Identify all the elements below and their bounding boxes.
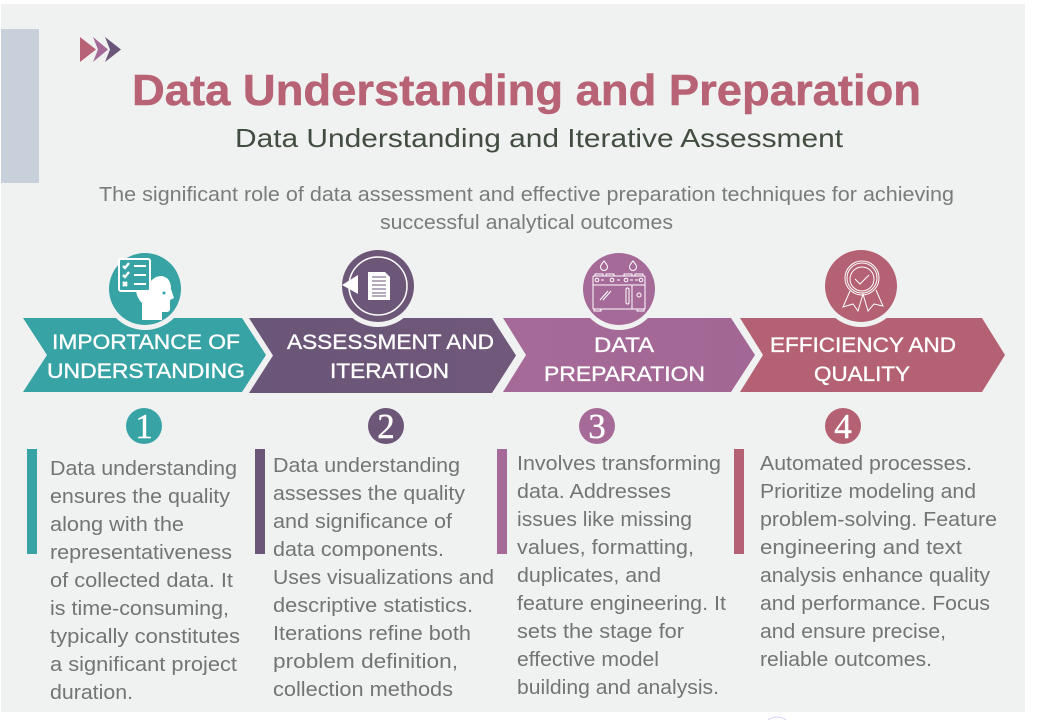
text block 3: duplicates, and xyxy=(517,565,661,587)
text block 3 xyxy=(517,453,726,699)
arrow labels: PREPARATION xyxy=(544,363,705,386)
cropped circle at bottom edge xyxy=(762,717,792,720)
text block 2: Iterations refine both xyxy=(273,623,471,645)
text block 2 xyxy=(273,455,494,701)
number badge 4 xyxy=(825,407,861,446)
text block 4: engineering and text xyxy=(760,537,962,559)
number badge 2 xyxy=(368,407,404,446)
text block 3: sets the stage for xyxy=(517,621,684,643)
text block 2: assesses the quality xyxy=(273,483,465,505)
number badge 2: 2 xyxy=(377,407,395,446)
icon: stove xyxy=(578,248,660,330)
text block 4: and ensure precise, xyxy=(760,621,946,643)
arrow labels: ASSESSMENT AND xyxy=(287,331,494,354)
text block 1: ensures the quality xyxy=(50,486,230,508)
number badge 1 xyxy=(126,407,162,446)
text block 1: representativeness xyxy=(50,542,232,564)
icon: award ribbon xyxy=(820,245,902,327)
number badge 3 xyxy=(579,407,615,446)
text block 1: duration. xyxy=(50,682,133,704)
text block 2: collection methods xyxy=(273,679,453,701)
text block 1: a significant project xyxy=(50,654,237,676)
number badge 3: 3 xyxy=(588,407,606,446)
arrow: assessment and iteration xyxy=(249,318,516,393)
accent bar 2 xyxy=(255,449,265,554)
arrow labels: DATA xyxy=(594,334,654,357)
text block 3: data. Addresses xyxy=(517,481,671,503)
subtitle: Data Understanding and Iterative Assessment xyxy=(235,123,844,153)
text block 4: analysis enhance quality xyxy=(760,565,990,587)
arrow: efficiency and quality xyxy=(740,318,1005,392)
number badge 1: 1 xyxy=(135,407,153,446)
text block 3: effective model xyxy=(517,649,659,671)
text block 3: issues like missing xyxy=(517,509,692,531)
text block 2: problem definition, xyxy=(273,651,458,673)
text block 4 xyxy=(760,453,997,671)
icon: triple chevrons xyxy=(80,37,121,62)
text block 4: reliable outcomes. xyxy=(760,649,932,671)
icon: document with circular arrow xyxy=(337,245,419,327)
accent bar 4 xyxy=(734,449,744,554)
text block 1: typically constitutes xyxy=(50,626,240,648)
arrow labels: EFFICIENCY AND xyxy=(770,334,956,357)
text block 4: and performance. Focus xyxy=(760,593,990,615)
text block 2: data components. xyxy=(273,539,444,561)
text block 2: Data understanding xyxy=(273,455,460,477)
text block 2: and significance of xyxy=(273,511,452,533)
text block 1: Data understanding xyxy=(50,458,237,480)
text block 4: problem-solving. Feature xyxy=(760,509,997,531)
arrow labels xyxy=(47,331,956,386)
icon: checklist and head xyxy=(104,248,186,330)
text block 2: Uses visualizations and xyxy=(273,567,494,589)
text block 1: is time-consuming, xyxy=(50,598,229,620)
number badge 4: 4 xyxy=(834,407,852,446)
text block 3: feature engineering. It xyxy=(517,593,726,615)
arrow labels: UNDERSTANDING xyxy=(47,360,245,383)
text block 3: building and analysis. xyxy=(517,677,719,699)
text block 1: along with the xyxy=(50,514,184,536)
description: The significant role of data assessment and effective preparation techniques for achieving xyxy=(99,184,954,206)
text block 1: of collected data. It xyxy=(50,570,233,592)
arrow labels: IMPORTANCE OF xyxy=(52,331,240,354)
text block 4: Prioritize modeling and xyxy=(760,481,976,503)
text block 3: Involves transforming xyxy=(517,453,721,475)
arrow labels: QUALITY xyxy=(814,363,910,386)
description: successful analytical outcomes xyxy=(380,212,673,234)
accent bar 1 xyxy=(27,449,37,554)
text block 3: values, formatting, xyxy=(517,537,694,559)
text block 2: descriptive statistics. xyxy=(273,595,473,617)
arrow: importance of understanding xyxy=(23,318,266,392)
decorative side block xyxy=(1,29,39,183)
title: Data Understanding and Preparation xyxy=(132,66,921,115)
description xyxy=(99,184,954,234)
arrow labels: ITERATION xyxy=(330,360,449,383)
text block 1 xyxy=(50,458,240,704)
accent bar 3 xyxy=(497,449,507,554)
arrow: data preparation xyxy=(503,318,755,392)
text block 4: Automated processes. xyxy=(760,453,972,475)
